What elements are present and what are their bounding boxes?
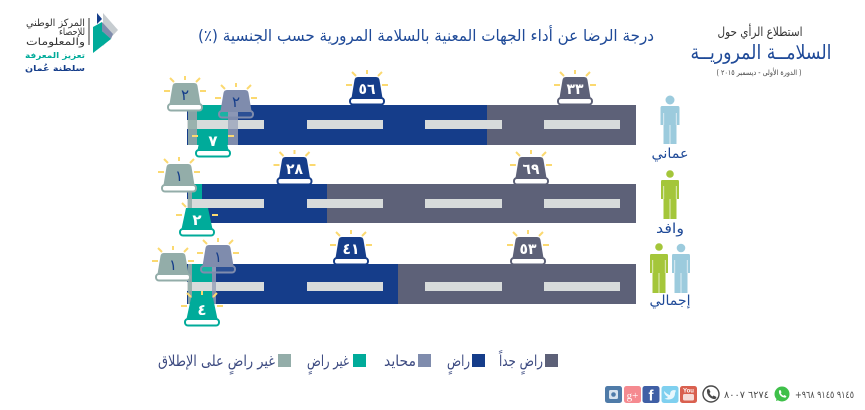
beacon: total very dissatisfied 1 bbox=[152, 246, 194, 280]
row: total bar bbox=[187, 264, 636, 304]
footer contacts bbox=[605, 386, 854, 404]
beacon: total satisfied 41 bbox=[330, 230, 372, 264]
logo mark bbox=[93, 13, 118, 53]
label: total: إجمالي bbox=[650, 293, 691, 309]
survey header bbox=[690, 23, 832, 77]
beacon: Omani neutral 2 bbox=[215, 83, 257, 118]
beacon: Omani neutral 2: ٢ bbox=[232, 93, 240, 111]
logo slogan: تعزيز المعرفة bbox=[25, 51, 85, 60]
icon: facebook bbox=[642, 386, 660, 404]
survey kicker: استطلاع الرأي حول bbox=[718, 23, 802, 40]
logo name text: للإحصاء bbox=[59, 27, 85, 38]
logo name text: والمعلومات bbox=[26, 37, 85, 48]
text: phone number: ٨٠٠٧ ٦٢٧٤ bbox=[724, 390, 769, 401]
beacon: expatriate very dissatisfied 1 bbox=[158, 157, 200, 192]
label: expatriate: وافد bbox=[656, 221, 684, 237]
legend: very dissatisfied: غير راضٍ على الإطلاق bbox=[158, 352, 275, 375]
icon: youtube bbox=[680, 386, 697, 403]
logo name text: المركز الوطني bbox=[26, 18, 85, 29]
survey edition: ( الدورة الأولى - ديسمبر ٢٠١٥ ) bbox=[716, 67, 802, 77]
icon: whatsapp bbox=[774, 386, 790, 402]
beacon: total very dissatisfied 1: ١ bbox=[169, 256, 177, 274]
beacon: total neutral 1 bbox=[197, 238, 239, 272]
icon: facebook: f bbox=[648, 388, 654, 404]
person icons: total bbox=[650, 243, 690, 293]
beacon: total dissatisfied 4 bbox=[181, 291, 223, 326]
legend: very satisfied bbox=[498, 350, 558, 375]
person icon: Omani bbox=[660, 96, 680, 144]
beacon: total neutral 1: ١ bbox=[214, 248, 222, 266]
beacon: expatriate very dissatisfied 1: ١ bbox=[175, 167, 183, 185]
beacon: total very satisfied 53: ٥٣ bbox=[520, 240, 536, 258]
beacon: expatriate dissatisfied 2: ٢ bbox=[192, 211, 202, 229]
beacon: expatriate dissatisfied 2 bbox=[176, 203, 218, 236]
icon: twitter bbox=[662, 386, 678, 403]
legend: satisfied bbox=[447, 352, 485, 375]
beacon: total satisfied 41: ٤١ bbox=[342, 240, 360, 258]
person icon: expatriate bbox=[661, 170, 679, 219]
beacon: total dissatisfied 4: ٤ bbox=[197, 301, 207, 319]
row: Omani bar bbox=[187, 105, 636, 145]
label: Omani: عماني bbox=[652, 146, 688, 162]
icon: phone bbox=[703, 386, 719, 402]
icon: google plus: g+ bbox=[627, 390, 638, 402]
row: expatriate bar bbox=[187, 184, 636, 223]
beacon: expatriate satisfied 28: ٢٨ bbox=[286, 160, 303, 178]
logo country: سلطنة عُمان bbox=[25, 64, 85, 73]
icon: youtube: You bbox=[683, 388, 694, 394]
beacon: expatriate very satisfied 69 bbox=[510, 150, 552, 184]
survey title: السلامــة المروريــة bbox=[690, 40, 832, 64]
beacon: Omani dissatisfied 7: ٧ bbox=[208, 132, 218, 150]
beacon: expatriate very satisfied 69: ٦٩ bbox=[522, 160, 540, 178]
icon: instagram bbox=[605, 386, 622, 403]
beacon: Omani dissatisfied 7 bbox=[192, 129, 234, 156]
legend: neutral: محايد bbox=[384, 352, 416, 370]
legend: very satisfied: راضٍ جداً bbox=[498, 350, 543, 375]
beacon: Omani very dissatisfied 2 bbox=[164, 76, 206, 110]
beacon: Omani satisfied 56: ٥٦ bbox=[358, 80, 376, 98]
legend: dissatisfied: غير راضٍ bbox=[307, 352, 349, 375]
logo divider bbox=[88, 18, 90, 45]
icon: google plus bbox=[624, 386, 641, 403]
beacon: total very satisfied 53 bbox=[507, 230, 549, 264]
beacon: Omani very dissatisfied 2: ٢ bbox=[181, 86, 189, 104]
chart title: درجة الرضا عن أداء الجهات المعنية بالسلامة المرورية حسب الجنسية (٪) bbox=[198, 25, 654, 46]
beacon: Omani very satisfied 33 bbox=[554, 70, 596, 104]
beacon: Omani satisfied 56 bbox=[346, 70, 388, 104]
legend: satisfied: راضٍ bbox=[447, 352, 470, 375]
logo bbox=[25, 13, 118, 73]
legend bbox=[158, 350, 558, 375]
logo name text bbox=[26, 18, 85, 48]
beacon: expatriate satisfied 28 bbox=[274, 150, 316, 184]
beacon: Omani very satisfied 33: ٣٣ bbox=[566, 80, 584, 98]
